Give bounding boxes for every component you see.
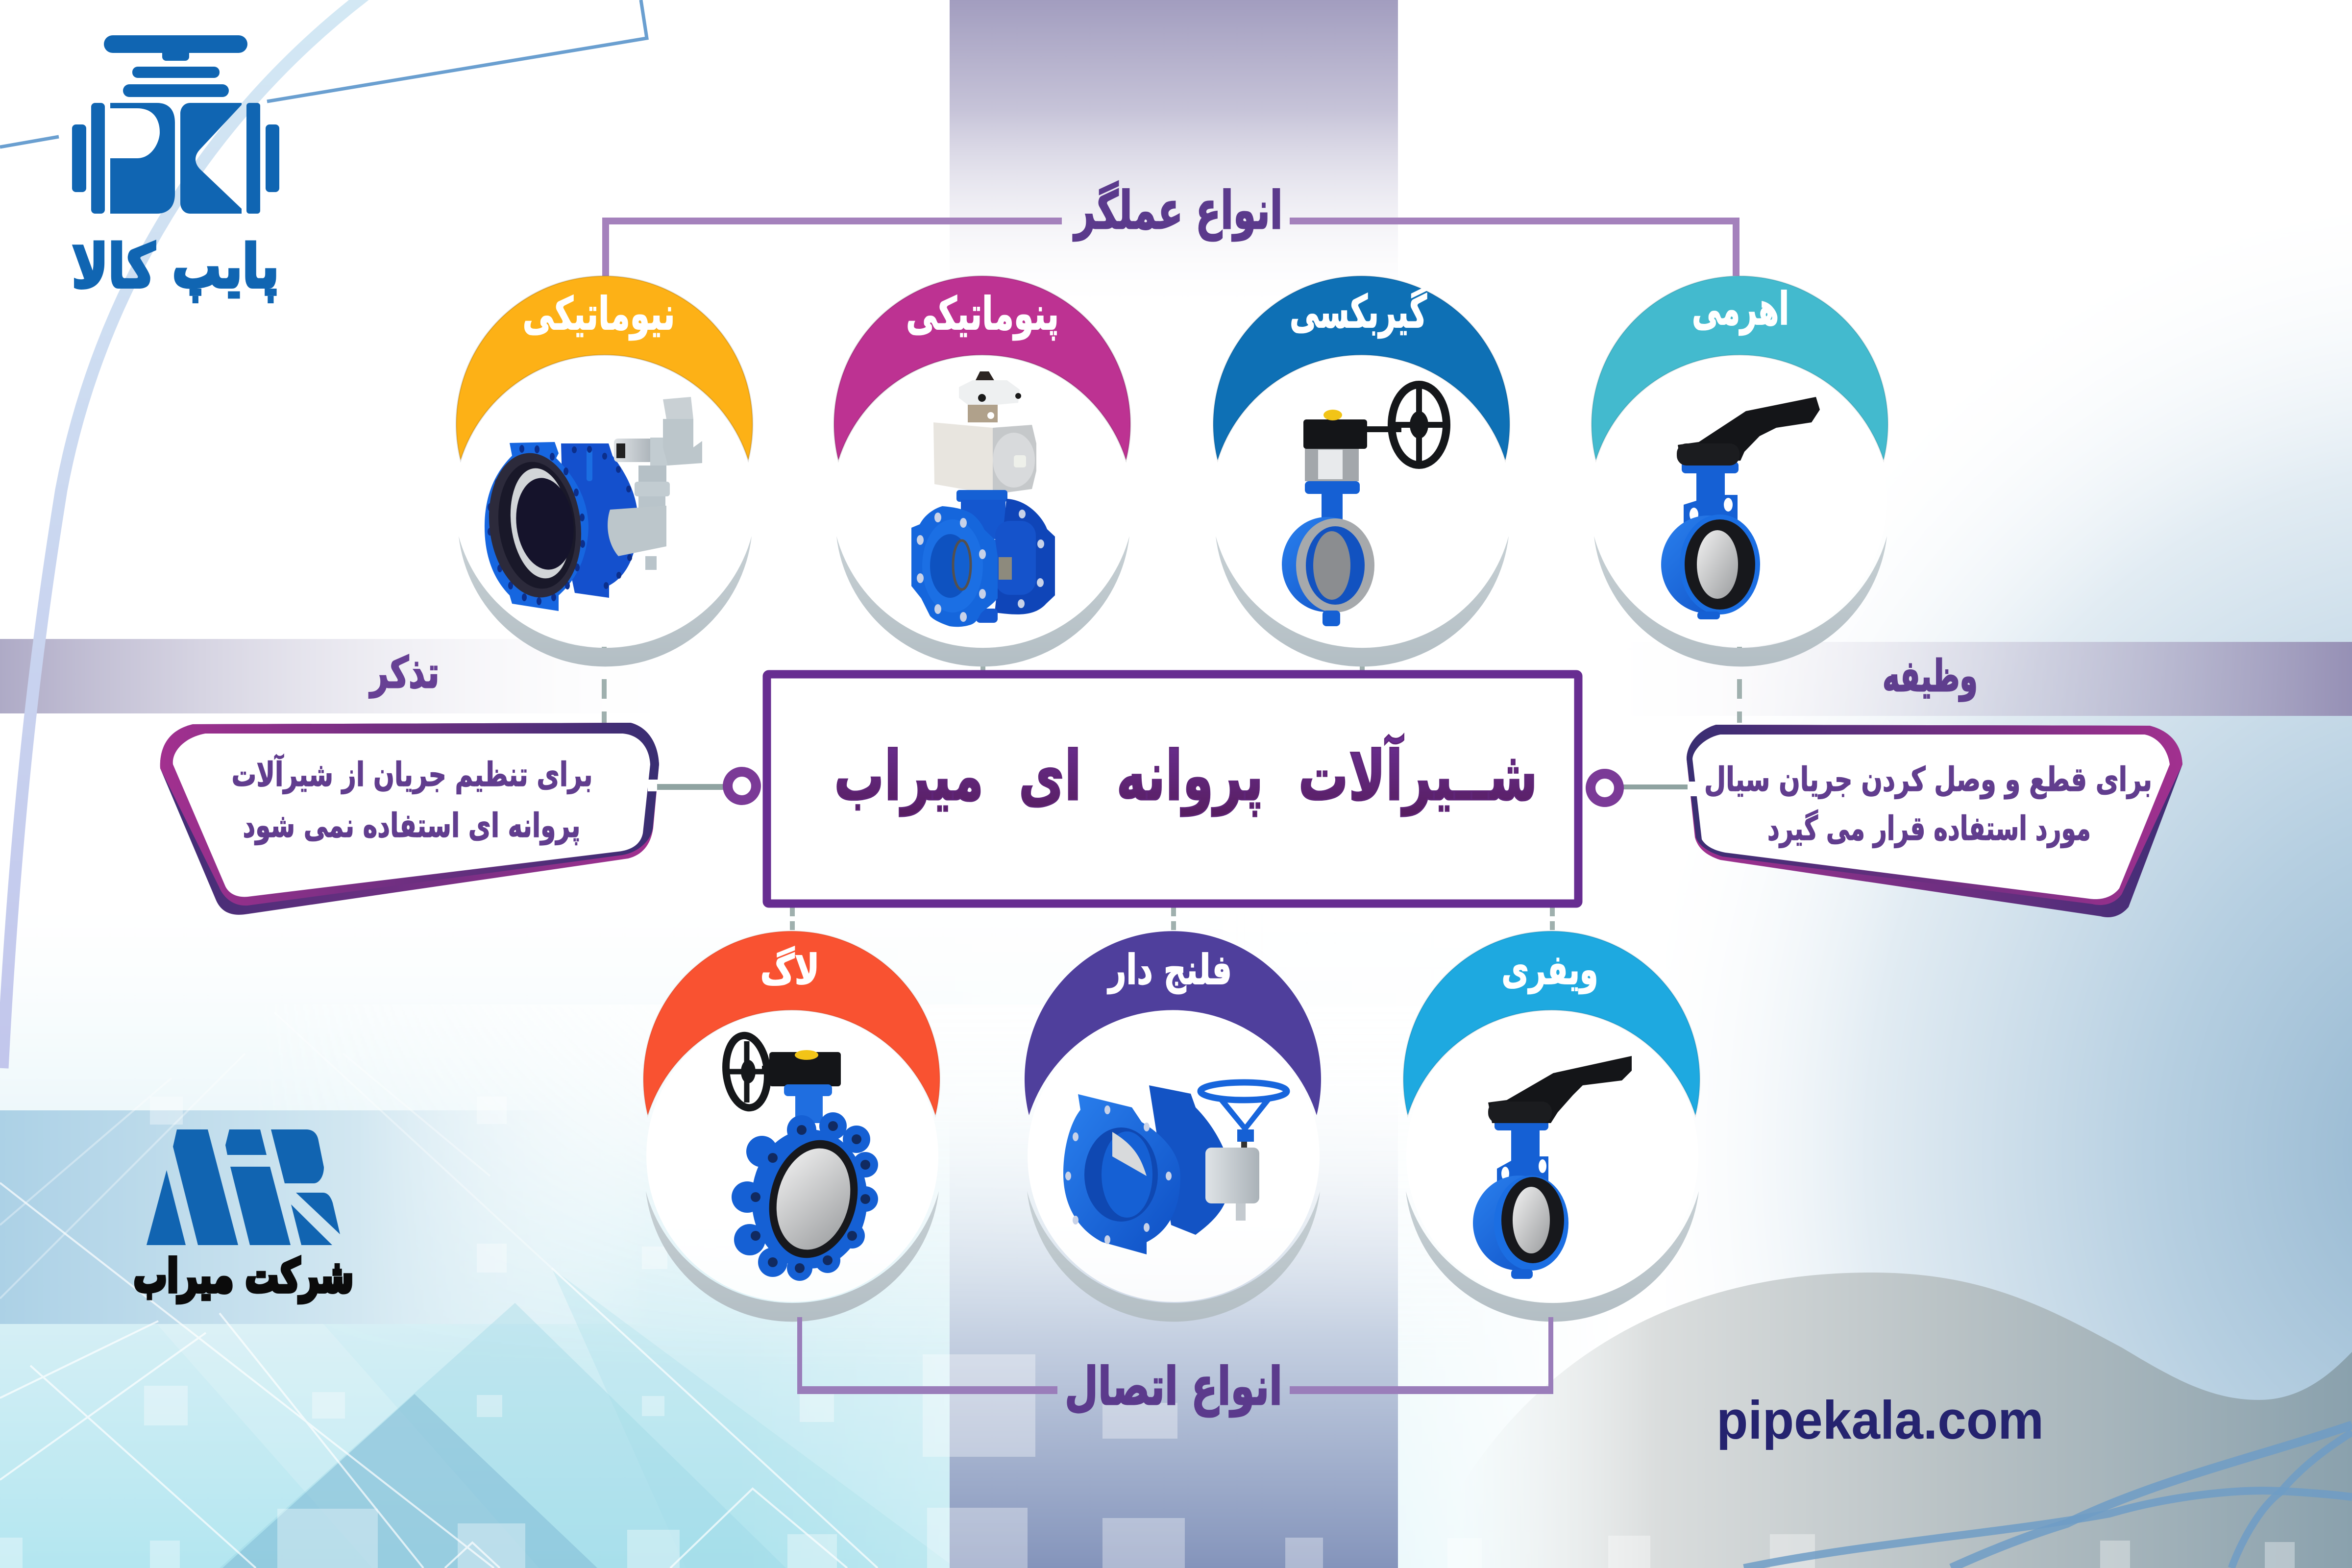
heading: connection types: انواع اتصال [1065, 1356, 1282, 1417]
panel: reminder [160, 647, 756, 915]
logo: pipekala: پایپ کالا [72, 232, 279, 302]
card: pneumatic actuator [834, 276, 1130, 666]
logo: mirab: شرکت میراب [133, 1250, 354, 1303]
bracket: actuator types [606, 180, 1736, 276]
crescent [456, 276, 753, 460]
label: فلنج دار [1107, 946, 1232, 994]
crescent [834, 276, 1130, 460]
crescent [1403, 931, 1700, 1115]
card: gearbox actuator [1213, 276, 1510, 666]
valve: lug gearbox [722, 1033, 878, 1281]
heading: reminder: تذکر [369, 647, 439, 698]
valve: pneumatic flanged [911, 371, 1055, 627]
bracket: connection types [797, 1317, 1553, 1417]
label: لاگ [760, 946, 819, 994]
valve: gearbox wafer [1282, 385, 1446, 626]
heading: actuator types: انواع عملگر [1073, 180, 1283, 241]
connector: function ring [1591, 774, 1688, 802]
card: lever actuator [1592, 276, 1888, 666]
card: lug connection [643, 931, 940, 1322]
text: function: مورد استفاده قرار می گیرد [1767, 809, 2091, 848]
logo: pipekala [72, 35, 279, 302]
card: wafer connection [1403, 931, 1700, 1322]
valve: flanged with gearbox [1063, 1082, 1287, 1254]
label: اهرمی [1692, 283, 1789, 336]
label: گیربکسی [1290, 286, 1427, 339]
valve: wafer lever [1473, 1056, 1632, 1279]
valve: lever wafer [1661, 397, 1820, 619]
text: reminder: برای تنظیم جریان از شیرآلات [231, 754, 593, 794]
connector: reminder ring [657, 772, 756, 800]
label: نیوماتیکی [522, 288, 675, 341]
text: function: برای قطع و وصل کردن جریان سیال [1704, 760, 2152, 799]
website url: pipekala.com [1716, 1390, 2044, 1450]
title: شــیرآلات پروانه ای میراب [834, 734, 1538, 817]
crescent [1025, 931, 1321, 1115]
text: function [1704, 760, 2152, 848]
valve: electric flanged [481, 397, 702, 611]
central title box [767, 674, 1578, 904]
label: ویفری [1501, 946, 1598, 994]
heading: function: وظیفه [1883, 651, 1978, 702]
crescent [1592, 276, 1888, 460]
text: reminder: پروانه ای استفاده نمی شود [243, 807, 580, 845]
label: پنوماتیکی [906, 288, 1059, 341]
crescent [1213, 276, 1510, 460]
logo: mirab [133, 1129, 354, 1303]
panel: function [1591, 651, 2182, 917]
card: neumatic actuator [456, 276, 753, 666]
crescent [643, 931, 940, 1115]
text: reminder [231, 754, 593, 845]
card: flanged connection [1025, 931, 1321, 1322]
connector: bottom type links and dashes [604, 647, 1740, 931]
